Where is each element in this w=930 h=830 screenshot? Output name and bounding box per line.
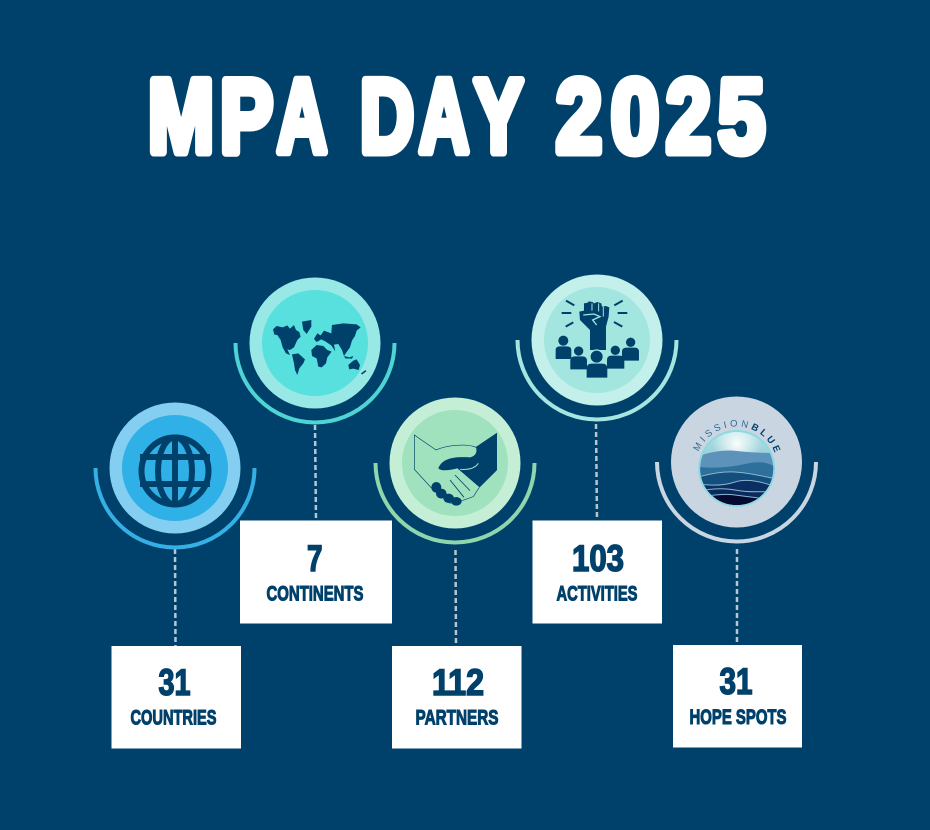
stat box: 103 activities: ACTIVITIES — [556, 582, 638, 606]
connector: hope spots — [736, 549, 738, 645]
stat box: 31 countries: 31 — [158, 662, 190, 703]
stat box: 7 continents — [240, 520, 392, 624]
logo wordmark: MISSIONBLUE — [693, 420, 780, 452]
title: Y — [474, 59, 523, 175]
badge: continents world map — [236, 278, 394, 422]
stat box: 7 continents: 7 — [307, 538, 322, 579]
badge: countries globe — [96, 402, 254, 547]
icon: handshake — [414, 433, 497, 506]
stat box: 112 partners — [392, 646, 522, 748]
icon: world map — [273, 320, 366, 375]
title: A — [419, 59, 469, 175]
icon: raised fist with crowd — [556, 301, 639, 378]
icon: globe — [140, 437, 210, 505]
title: D — [360, 59, 414, 175]
title: P — [220, 59, 273, 175]
title: A — [277, 59, 327, 175]
connector: activities — [596, 424, 597, 520]
badge: partners handshake — [376, 398, 534, 542]
stat box: 31 hope spots: HOPE SPOTS — [690, 705, 786, 729]
stat box: 103 activities: 103 — [572, 538, 624, 579]
icon: mission blue logo — [693, 420, 780, 507]
stat box: 103 activities — [532, 520, 662, 624]
stat box: 112 partners: 112 — [432, 662, 484, 703]
stat box: 112 partners: PARTNERS — [416, 706, 498, 730]
stat box: 31 hope spots: 31 — [720, 661, 752, 702]
title: 0 — [611, 59, 659, 175]
title: M — [148, 59, 214, 175]
connector: continents — [315, 425, 316, 520]
stat box: 31 hope spots — [673, 645, 802, 748]
title — [148, 59, 765, 175]
stat box: 31 countries: COUNTRIES — [130, 706, 216, 730]
title: 2 — [556, 59, 602, 175]
connector: partners — [454, 550, 457, 646]
badge: activities raised fist — [518, 274, 676, 420]
title: 5 — [718, 59, 765, 175]
stat box: 31 countries — [112, 646, 241, 748]
title: 2 — [666, 59, 711, 175]
connector: countries — [174, 549, 177, 646]
badge: hope spots mission blue — [655, 396, 818, 544]
stat box: 7 continents: CONTINENTS — [266, 582, 364, 606]
